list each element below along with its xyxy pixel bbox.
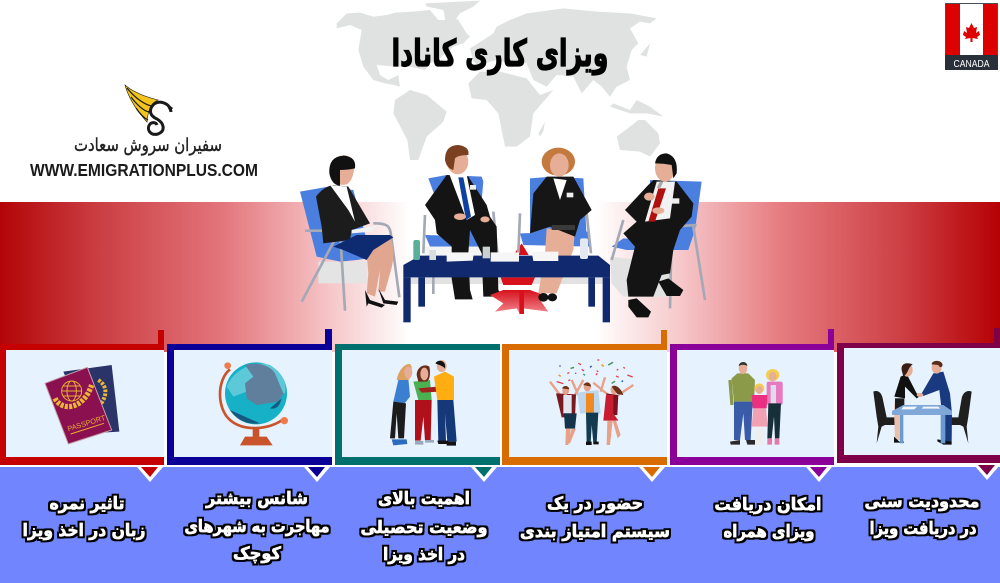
person: left woman <box>300 155 399 311</box>
caption 6: در دریافت ویزا <box>870 519 977 539</box>
logo url: WWW.EMIGRATIONPLUS.COM <box>30 160 258 180</box>
logo <box>30 85 258 180</box>
caption 1 <box>22 494 146 541</box>
caption 6 <box>864 492 980 539</box>
caption 3 <box>360 489 488 565</box>
person left <box>550 380 583 395</box>
pointer 6 <box>974 465 1000 480</box>
pointer 5 <box>806 467 832 482</box>
person: man with blue tie <box>423 145 503 299</box>
caption 6: محدودیت سنی <box>864 492 980 512</box>
background gradient band <box>0 202 1000 352</box>
caption 3: در اخذ ویزا <box>383 545 465 565</box>
caption 5: امکان دریافت <box>714 495 822 515</box>
caption 2: مهاجرت به شهرهای <box>184 517 330 537</box>
icon: students reading <box>390 360 457 446</box>
icon: maple leaf under table <box>490 243 548 314</box>
panel 2: small cities <box>167 329 332 564</box>
pointer 3 <box>471 467 497 482</box>
panels background strip <box>0 467 1000 583</box>
logo persian name: سفیران سروش سعادت <box>74 135 222 156</box>
icon: canada flag: CANADA <box>954 59 990 70</box>
icon: winged bird logo <box>125 85 173 134</box>
caption 5 <box>714 495 822 542</box>
caption 2: شانس بیشتر <box>205 489 308 509</box>
icon: passports <box>45 365 119 444</box>
caption 1: زبان در اخذ ویزا <box>22 521 146 541</box>
caption 2: کوچک <box>233 544 281 564</box>
person: woman in centre <box>518 148 592 302</box>
icon: business handshake at table <box>873 361 972 445</box>
floor shadows <box>411 257 670 297</box>
caption 1: تاثیر نمره <box>50 494 124 514</box>
illustration: panel of four people at table <box>300 145 705 322</box>
world map <box>337 1 663 160</box>
caption 3: وضعیت تحصیلی <box>360 518 488 538</box>
caption 4: حضور در یک <box>547 494 643 514</box>
table <box>403 238 610 322</box>
panel 3: education <box>335 344 500 565</box>
caption 5: ویزای همراه <box>724 522 814 542</box>
pointer 2 <box>304 467 330 482</box>
caption 4 <box>520 494 670 542</box>
panel 1: language score <box>0 330 164 541</box>
pointer 4 <box>639 467 665 482</box>
caption 2 <box>184 489 330 564</box>
person middle <box>572 377 605 395</box>
person right <box>593 383 633 395</box>
icon: family <box>730 362 783 445</box>
pointer 1 <box>137 467 163 482</box>
panel 4: points system <box>502 330 670 542</box>
panel 6: age limit <box>837 328 1000 539</box>
icon: canada flag <box>945 3 998 70</box>
icon: globe <box>220 362 288 445</box>
icon: passports: PASSPORT <box>66 413 107 433</box>
caption 3: اهمیت بالای <box>378 489 470 509</box>
title: ویزای کاری کانادا <box>392 32 608 75</box>
caption 4: سیستم امتیاز بندی <box>520 522 670 542</box>
person: man with microphone <box>612 153 705 317</box>
panel 5: accompanying visa <box>670 329 834 542</box>
icon: celebrating people with confetti <box>550 360 633 445</box>
